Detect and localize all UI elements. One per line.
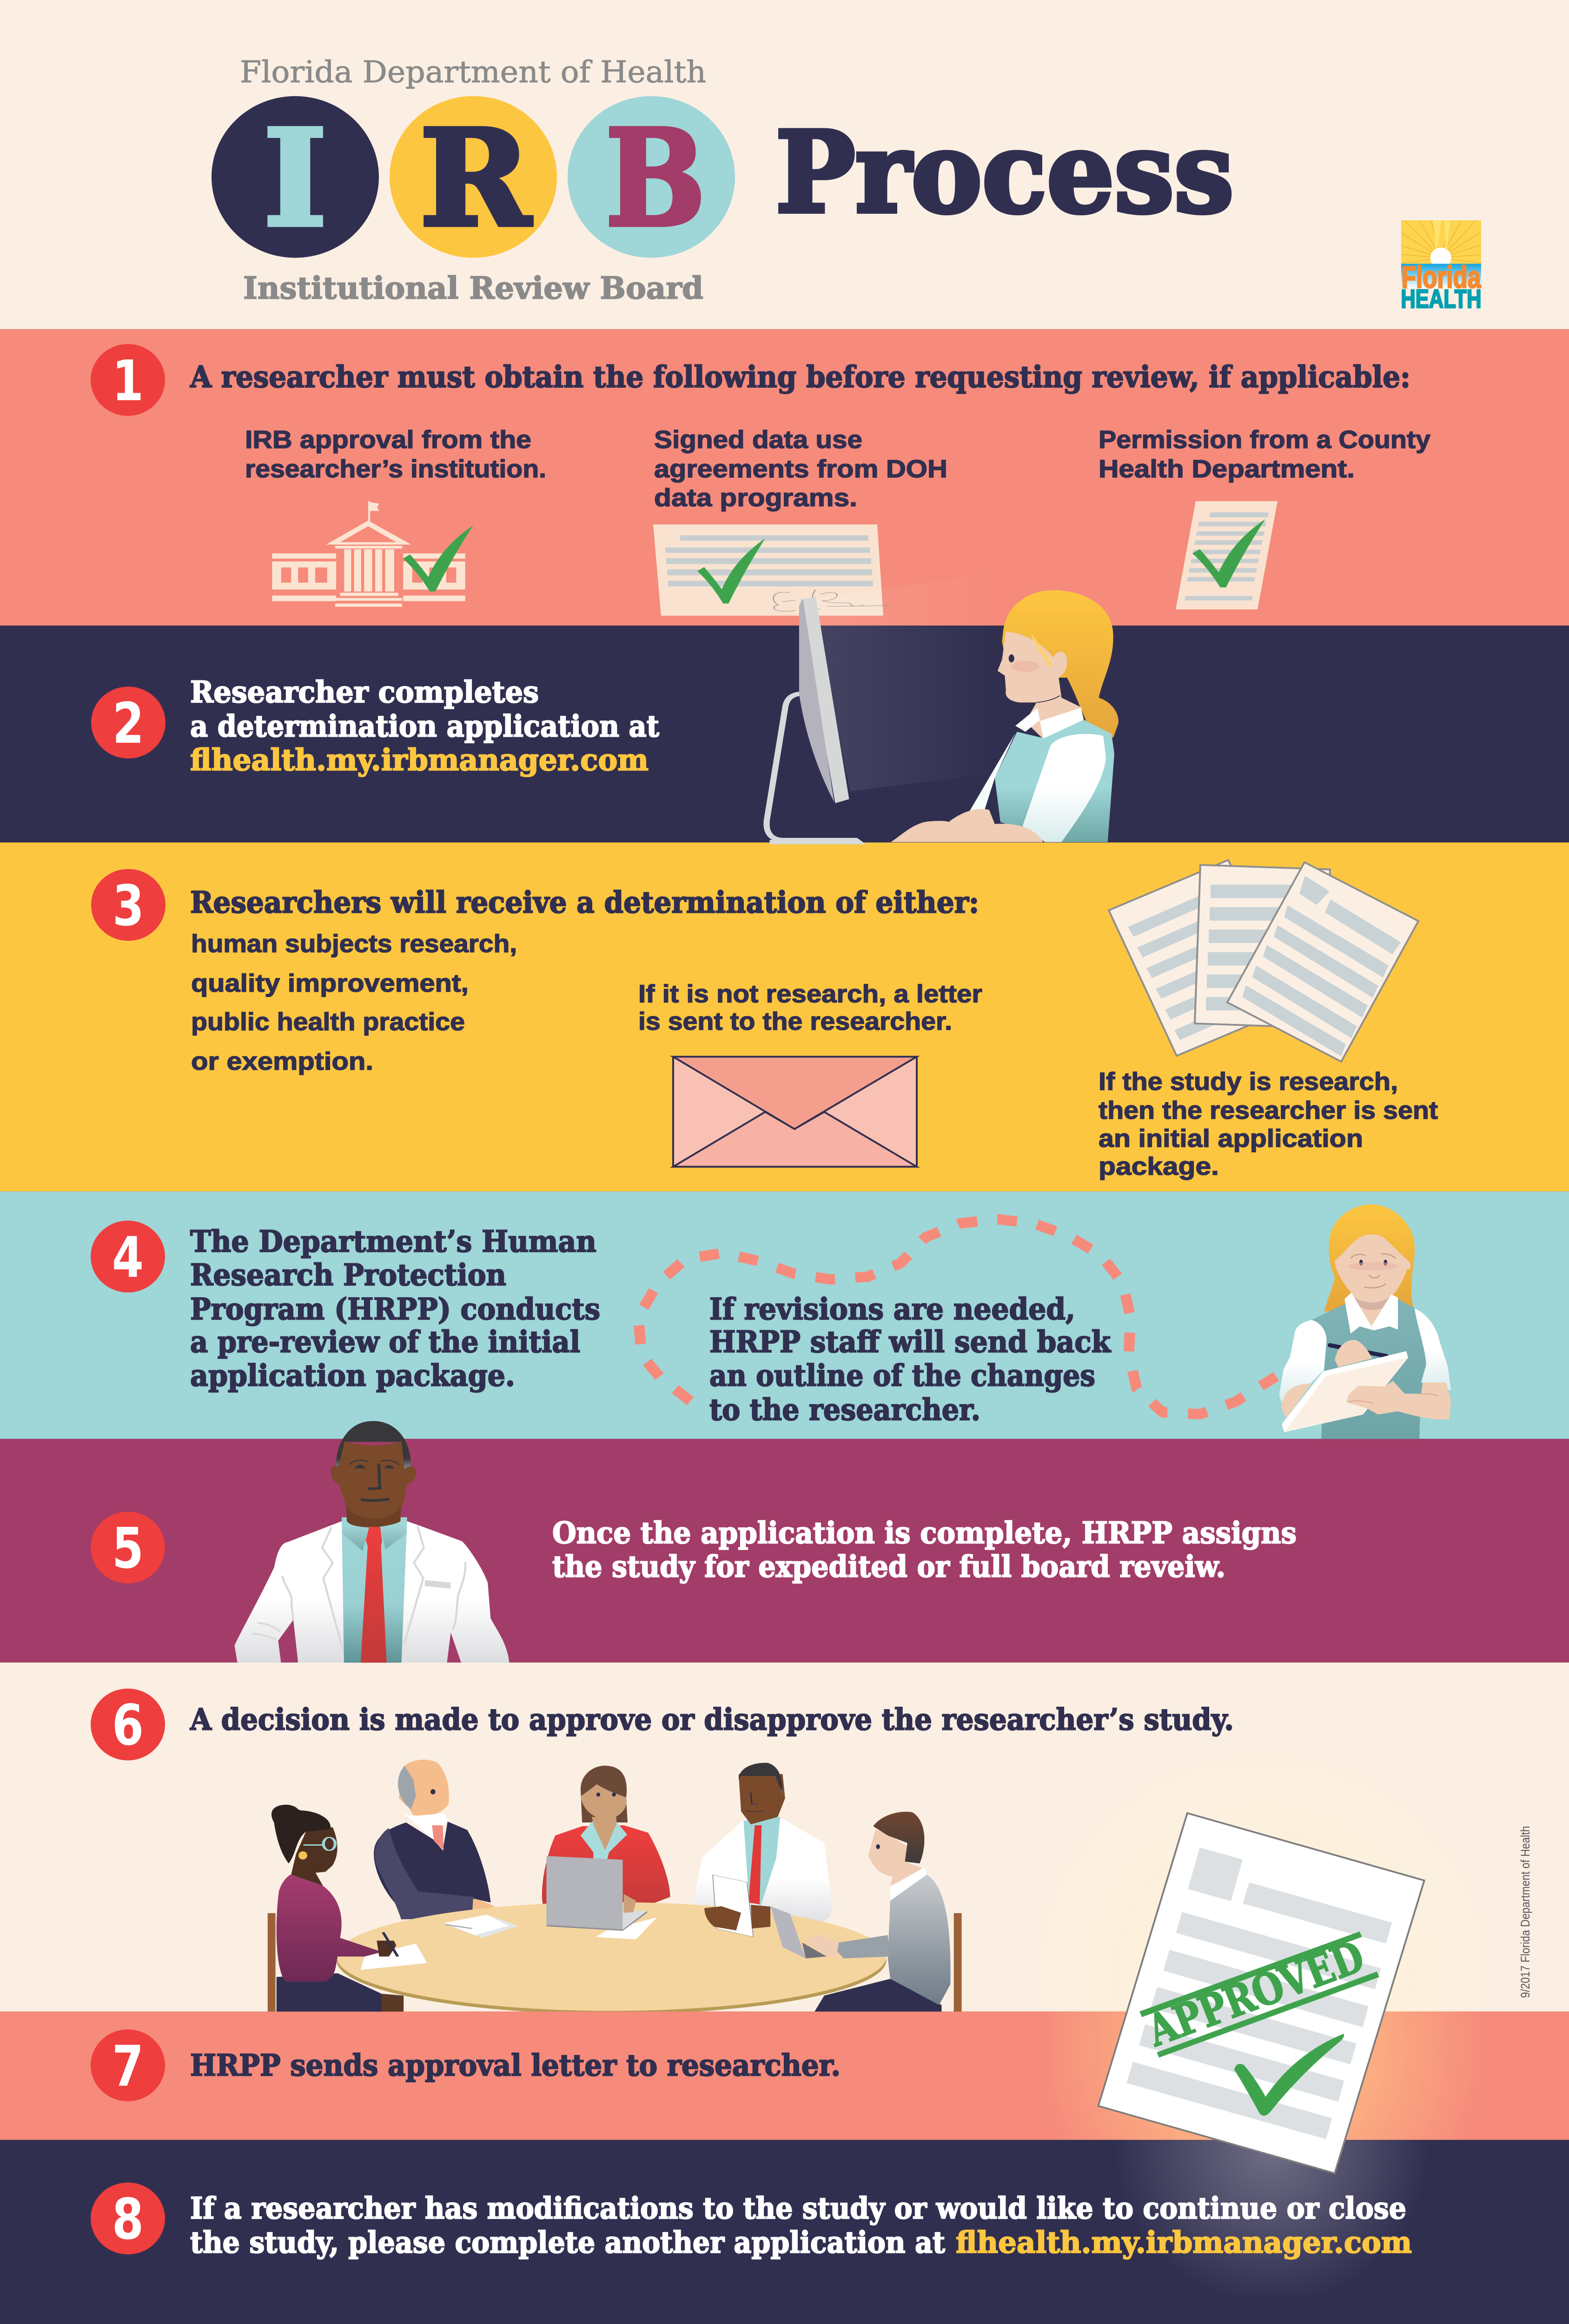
step 4 text: application package.: [190, 1359, 515, 1393]
requirement: data use agreements: agreements from DOH: [654, 455, 947, 483]
revisions text: an outline of the changes: [709, 1359, 1095, 1393]
circle letter B: B: [605, 100, 706, 257]
step 8 text: If a researcher has modifications to the study or would like to continue or close: [190, 2191, 1406, 2226]
determination list: or exemption.: [191, 1047, 373, 1075]
step 4 text: Program (HRPP) conducts: [190, 1292, 600, 1327]
research note: then the researcher is sent: [1099, 1096, 1438, 1124]
requirement: IRB approval: researcher’s institution.: [245, 455, 546, 483]
requirement: county permission: Health Department.: [1099, 455, 1355, 483]
circle letter R: [390, 96, 557, 258]
header: [212, 54, 1482, 313]
illustration: woman with clipboard: [1279, 1204, 1451, 1439]
research note: an initial application: [1099, 1124, 1363, 1152]
number badge 2: 2: [113, 691, 144, 756]
panel: step 8: [91, 2183, 1412, 2260]
step 8 text: [190, 2191, 1412, 2260]
table items: [444, 1856, 827, 1958]
number badge 7: 7: [112, 2034, 144, 2099]
title: Process: Process: [775, 107, 1234, 238]
number badge 1: [91, 344, 165, 416]
step 5 text: the study for expedited or full board reveiw.: [552, 1549, 1225, 1584]
revisions text: [709, 1292, 1112, 1427]
step 8 text: flhealth.my.irbmanager.com: [956, 2225, 1412, 2260]
logo: Florida Health: [1401, 220, 1482, 313]
panel: step 2: [91, 574, 1119, 842]
step 2 text: [190, 675, 659, 778]
step 8 text: the study, please complete another application at: [190, 2225, 945, 2260]
copyright note: 9/2017 Florida Department of Health: [1518, 1826, 1532, 1998]
person: woman in red: [542, 1766, 670, 1912]
step 4 text: [190, 1224, 600, 1393]
requirement: county permission: Permission from a County: [1099, 425, 1430, 454]
number badge 4: 4: [112, 1225, 144, 1290]
number badge 5: 5: [112, 1516, 144, 1581]
determination list: [191, 929, 517, 1075]
step 2 text: Researcher completes: [190, 675, 539, 710]
dashed route arrow: [638, 1219, 1276, 1414]
step 4 text: Research Protection: [190, 1258, 506, 1293]
number badge 5: [91, 1512, 165, 1584]
not research note: If it is not research, a letter: [638, 979, 982, 1008]
determination list: quality improvement,: [191, 969, 469, 997]
panel: step 6: [91, 1689, 1532, 2014]
person: older man: [374, 1760, 505, 1919]
illustration: woman at computer: [767, 574, 1119, 842]
number badge 4: [91, 1221, 165, 1293]
requirement: data use agreements: [654, 425, 947, 512]
illustration: board meeting: [268, 1760, 962, 2014]
step 2 text: a determination application at: [190, 709, 659, 744]
research note: If the study is research,: [1099, 1067, 1398, 1096]
circle letter R: R: [419, 100, 533, 257]
requirement: data use agreements: Signed data use: [654, 425, 862, 454]
icon: application package papers: [1109, 860, 1418, 1062]
step 1 heading: A researcher must obtain the following before requesting review, if applicable:: [190, 360, 1410, 395]
icon: envelope: [673, 1056, 917, 1167]
icon: institution building with check: [272, 502, 473, 607]
determination list: public health practice: [191, 1007, 465, 1036]
icon: permission document with check: [1176, 501, 1278, 609]
step 6 heading: A decision is made to approve or disapprove the researcher’s study.: [190, 1703, 1234, 1737]
requirement: county permission: [1099, 425, 1430, 483]
logo: Florida Health: HEALTH: [1401, 284, 1482, 313]
number badge 6: [91, 1689, 165, 1760]
signature: [774, 589, 890, 611]
circle letter B: [568, 96, 735, 258]
illustration: doctor: [234, 1421, 509, 1663]
number badge 2: [91, 687, 166, 759]
panel: step 5: [91, 1421, 1297, 1663]
number badge 1: 1: [112, 348, 144, 413]
requirement: data use agreements: data programs.: [654, 483, 857, 512]
step 7 text: HRPP sends approval letter to researcher.: [190, 2048, 841, 2083]
number badge 3: [91, 869, 166, 941]
chairs: [268, 1913, 962, 2012]
check mark: [1234, 2034, 1344, 2116]
not research note: is sent to the researcher.: [638, 1007, 952, 1035]
person: doctor: [694, 1763, 832, 1927]
approved stamp: APPROVED: [1140, 1931, 1371, 2057]
logo: Florida Health: Florida: [1402, 260, 1481, 295]
number badge 8: 8: [112, 2186, 144, 2252]
icon: signed document with check: [653, 525, 890, 616]
panel: step 4: [91, 1204, 1451, 1439]
research note: [1099, 1067, 1438, 1180]
revisions text: to the researcher.: [709, 1393, 980, 1427]
table: [337, 1902, 887, 2014]
number badge 3: 3: [113, 873, 144, 938]
person: woman with glasses: [271, 1805, 427, 2012]
panel: step 3: [91, 860, 1438, 1180]
circle letter I: [212, 96, 379, 258]
not research note: [638, 979, 982, 1035]
step 3 heading: Researchers will receive a determination of either:: [190, 885, 979, 920]
requirement: IRB approval: [245, 425, 546, 483]
step 5 text: Once the application is complete, HRPP assigns: [552, 1516, 1297, 1551]
determination list: human subjects research,: [191, 929, 517, 957]
panel: step 1: [91, 344, 1430, 616]
header line: Institutional Review Board: Institutional Review Board: [243, 270, 703, 306]
screen light beam: [811, 574, 992, 791]
panel: step 7: [91, 1751, 1534, 2297]
step 4 text: a pre-review of the initial: [190, 1325, 580, 1360]
header line: Florida Department of Health: Florida Department of Health: [240, 54, 706, 90]
research note: package.: [1099, 1152, 1219, 1180]
person: man in grey: [805, 1812, 951, 2012]
step 4 text: The Department’s Human: [190, 1224, 596, 1259]
step 2 text: flhealth.my.irbmanager.com: [190, 743, 649, 778]
illustration: approved document: [1099, 1813, 1424, 2173]
glow behind approval document: [1000, 1751, 1534, 2297]
number badge 6: 6: [112, 1693, 144, 1758]
circle letter I: I: [263, 100, 327, 257]
number badge 8: [91, 2183, 165, 2254]
step 5 text: [552, 1516, 1297, 1584]
revisions text: HRPP staff will send back: [709, 1325, 1112, 1360]
number badge 7: [91, 2029, 165, 2101]
revisions text: If revisions are needed,: [709, 1292, 1075, 1327]
requirement: IRB approval: IRB approval from the: [245, 425, 531, 454]
